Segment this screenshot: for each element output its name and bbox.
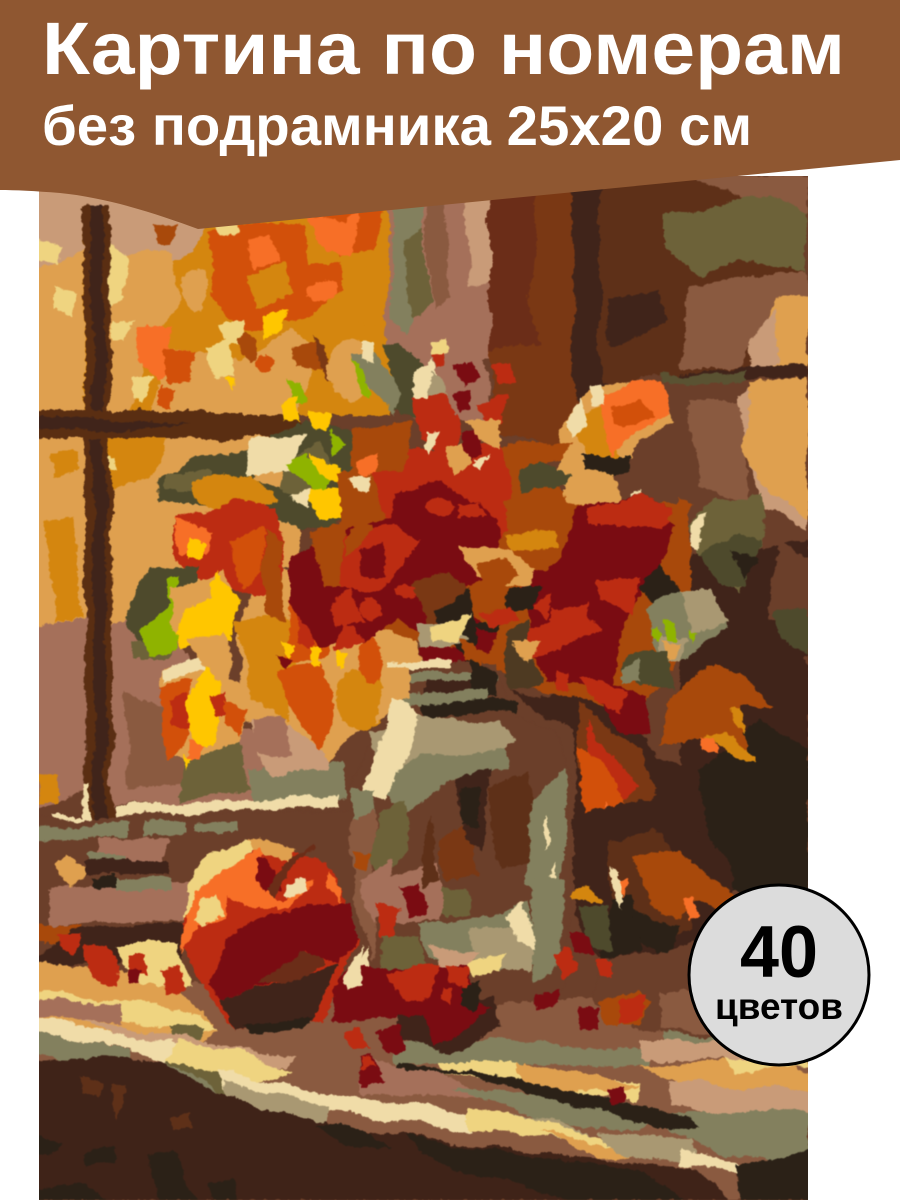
flower bouquet xyxy=(125,338,772,835)
right red mass xyxy=(500,490,695,730)
painting: autumn still life xyxy=(30,170,815,1200)
right wall with olive patch and golden highlight xyxy=(510,176,808,890)
number 40: 40 xyxy=(740,912,818,993)
grey-green flower and olive leaves right xyxy=(620,495,765,690)
top berries and pale leaves xyxy=(350,338,512,492)
berry cluster under vase xyxy=(330,945,500,1088)
orange maple leaf right xyxy=(660,662,772,762)
title: Картина по номерам xyxy=(42,7,845,90)
lower left leaf xyxy=(160,658,250,768)
header banner xyxy=(0,0,900,229)
subtitle: без подрамника 25х20 см xyxy=(42,94,752,157)
windowsill xyxy=(39,814,238,966)
badge: 40 colours xyxy=(689,885,869,1065)
red leaf left xyxy=(175,500,285,620)
upper right flower xyxy=(520,378,675,505)
central pillar and dark wall xyxy=(388,176,608,450)
glass vase xyxy=(340,660,572,1010)
window frame bars xyxy=(84,205,112,825)
lower red and orange leaf xyxy=(576,701,657,814)
centre orange leaf xyxy=(275,595,350,752)
window with autumn foliage xyxy=(30,170,392,825)
lower panes xyxy=(110,438,300,630)
berries on the sill left xyxy=(56,935,182,995)
gold leaf mass xyxy=(235,560,420,760)
lower right foliage xyxy=(570,798,734,1040)
vase highlights xyxy=(368,714,516,770)
olive leaves top left xyxy=(158,382,380,530)
dark front of sill xyxy=(30,1058,815,1200)
centre blossom with pale petals xyxy=(415,545,545,690)
vase neck xyxy=(372,660,515,720)
berries right of vase xyxy=(535,935,650,1108)
green and yellow leaf xyxy=(125,565,240,680)
dark red central mass xyxy=(290,440,690,720)
sunlit table xyxy=(30,945,810,1175)
apple xyxy=(181,840,355,1032)
banner shape xyxy=(0,0,900,229)
label цветов: цветов xyxy=(715,986,843,1027)
